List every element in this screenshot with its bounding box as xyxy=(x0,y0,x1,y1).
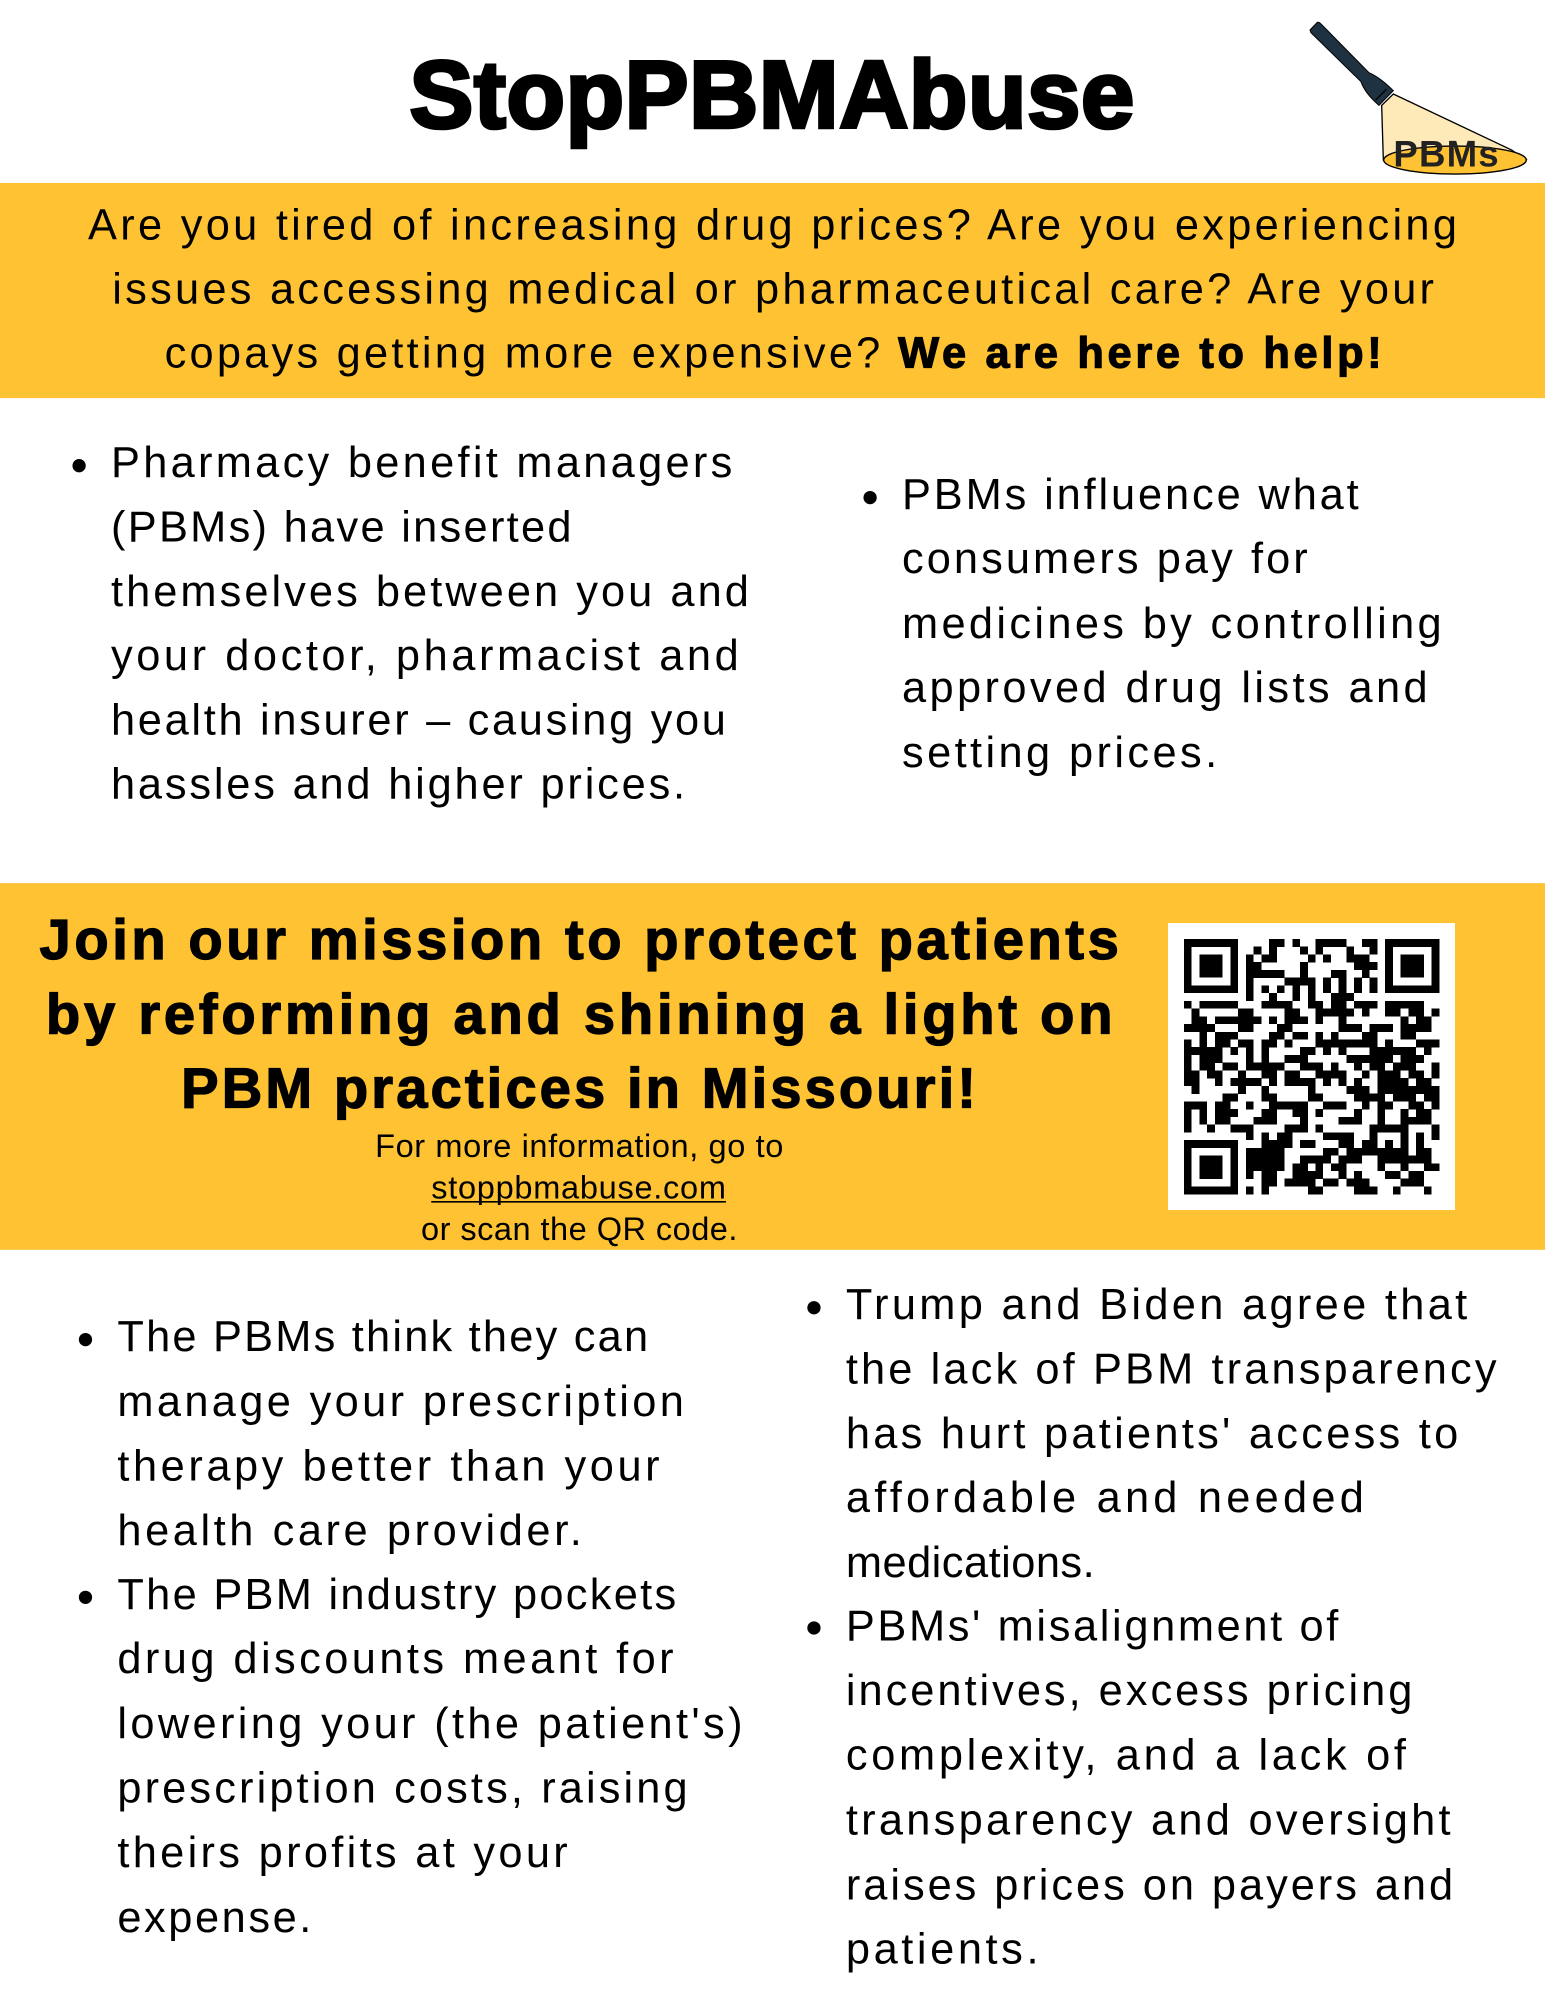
light spot xyxy=(1384,146,1526,174)
light beam xyxy=(1382,94,1526,160)
panel: lower right bullets xyxy=(807,1281,1497,1973)
more information text xyxy=(375,1128,783,1247)
panel: call to action banner xyxy=(0,883,1545,1250)
bullet text: themselves between you and xyxy=(111,568,749,616)
bullet text: discounts: expense. xyxy=(117,1894,311,1942)
bullet text: misalignment: transparency and oversight xyxy=(846,1797,1451,1845)
bullet text: setting prices. xyxy=(902,729,1217,777)
bullet text: therapy management: therapy better than your xyxy=(117,1442,660,1490)
bullet text: transparency: affordable and needed xyxy=(846,1474,1364,1522)
bullet marker xyxy=(807,1621,821,1635)
bullet text: misalignment: patients. xyxy=(846,1925,1039,1973)
intro text: copays getting more expensive? xyxy=(165,330,880,378)
bullet text: discounts: theirs profits at your xyxy=(117,1829,568,1877)
bullet text: discounts: lowering your (the patient's) xyxy=(117,1700,743,1748)
bullet text: therapy management: The PBMs think they can xyxy=(117,1313,648,1361)
bullet marker xyxy=(79,1591,92,1604)
bullet marker xyxy=(807,1301,821,1314)
call to action heading: PBM practices in Missouri! xyxy=(181,1056,976,1119)
more information text: For more information, go to xyxy=(375,1128,783,1164)
bullet text: transparency: has hurt patients' access to xyxy=(846,1410,1458,1458)
bullet text: transparency: the lack of PBM transparency xyxy=(846,1346,1497,1394)
bullet text: therapy management: health care provider. xyxy=(117,1507,582,1555)
call to action heading: by reforming and shining a light on xyxy=(46,982,1113,1045)
bullet text: misalignment: raises prices on payers and xyxy=(846,1862,1453,1910)
call to action heading: Join our mission to protect patients xyxy=(40,908,1119,971)
bullet text: Pharmacy benefit managers xyxy=(111,439,732,487)
bullet text xyxy=(902,471,1442,777)
bullet text: approved drug lists and xyxy=(902,664,1428,712)
bullet text: misalignment: complexity, and a lack of xyxy=(846,1732,1407,1780)
bullet text: transparency xyxy=(846,1281,1497,1587)
call to action heading xyxy=(40,908,1119,1119)
bullet text: discounts: drug discounts meant for xyxy=(117,1635,674,1683)
bullet text: discounts: The PBM industry pockets xyxy=(117,1571,676,1619)
panel: upper left bullet xyxy=(72,439,749,809)
bullet text: therapy management xyxy=(117,1313,684,1555)
PBMs label: PBMs xyxy=(1393,134,1499,175)
panel: upper right bullet xyxy=(863,471,1442,777)
bullet text: your doctor, pharmacist and xyxy=(111,632,739,680)
panel: lower left bullets xyxy=(79,1313,743,1942)
icon: flashlight shining on PBMs xyxy=(1310,22,1526,175)
bullet text: transparency: medications. xyxy=(846,1539,1095,1587)
bullet text: therapy management: manage your prescription xyxy=(117,1378,684,1426)
flashlight head ring xyxy=(1376,89,1387,100)
QR code xyxy=(1168,923,1455,1210)
more information text: stoppbmabuse.com xyxy=(431,1170,726,1206)
bullet xyxy=(863,491,877,504)
intro text xyxy=(88,202,1457,378)
bullet text: discounts xyxy=(117,1571,743,1942)
bullet text xyxy=(111,439,749,809)
bullet text: medicines by controlling xyxy=(902,600,1442,648)
bullet text: consumers pay for xyxy=(902,535,1308,583)
intro text: Are you tired of increasing drug prices? Are you experiencing xyxy=(88,202,1457,250)
bullet text: misalignment: PBMs' misalignment of xyxy=(846,1603,1339,1651)
bullet text: misalignment: incentives, excess pricing xyxy=(846,1667,1412,1715)
bullet marker xyxy=(79,1333,92,1346)
intro text: We are here to help! xyxy=(898,330,1382,378)
intro text: issues accessing medical or pharmaceutical care? Are your xyxy=(112,266,1434,314)
more information text: or scan the QR code. xyxy=(421,1211,737,1247)
bullet text: discounts: prescription costs, raising xyxy=(117,1765,688,1813)
bullet xyxy=(72,459,86,472)
title: StopPBMAbuse xyxy=(410,42,1134,149)
bullet text: misalignment xyxy=(846,1603,1453,1973)
panel: intro banner xyxy=(0,183,1545,398)
flashlight body xyxy=(1310,22,1393,105)
bullet text: (PBMs) have inserted xyxy=(111,503,572,551)
bullet text: hassles and higher prices. xyxy=(111,761,685,809)
bullet text: health insurer – causing you xyxy=(111,696,726,744)
bullet text: PBMs influence what xyxy=(902,471,1359,519)
bullet text: transparency: Trump and Biden agree that xyxy=(846,1281,1467,1329)
